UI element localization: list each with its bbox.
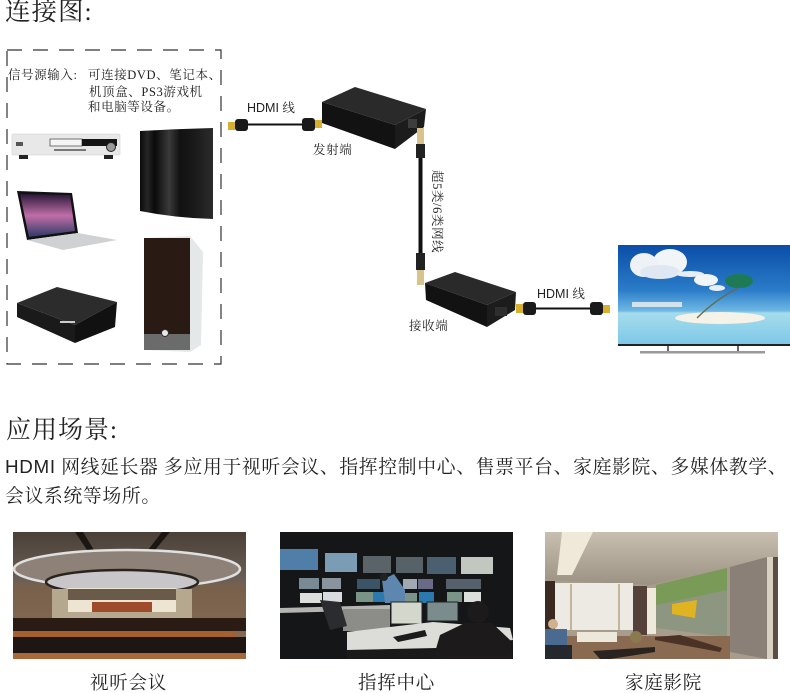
panel: command center (280, 532, 513, 693)
icon: game console (140, 128, 213, 219)
icon: laptop (17, 191, 117, 250)
HDMI cable: source to transmitter (228, 118, 322, 131)
icon: television (618, 245, 790, 354)
text: application description: 会议系统等场所。 (5, 485, 161, 507)
label: ethernet cable: 超5类/6类网线 (430, 170, 445, 253)
panel: home theater (545, 532, 778, 693)
text: signal source description: 和电脑等设备。 (88, 99, 180, 114)
icon: DVD player (12, 134, 120, 159)
icon: PC tower (144, 236, 203, 352)
label: receiver: 接收端 (409, 318, 448, 333)
label: HDMI cable 1: HDMI 线 (247, 100, 295, 115)
photo: command center (280, 532, 513, 659)
device: transmitter (322, 87, 426, 149)
text: signal source description (8, 67, 222, 114)
photo: conference room (13, 532, 246, 659)
label: HDMI cable 2: HDMI 线 (537, 286, 585, 301)
icon: set-top box (17, 287, 117, 343)
text: signal source description: 信号源输入: (8, 67, 78, 82)
text: application description (5, 456, 787, 507)
panel: conference room (13, 532, 246, 693)
text: signal source description: 可连接DVD、笔记本、 (88, 67, 222, 82)
ethernet cable (416, 128, 425, 285)
text: application description: HDMI 网线延长器 多应用于视听会议、指挥控制中心、售票平台、家庭影院、多媒体教学、 (5, 456, 787, 478)
label: transmitter: 发射端 (313, 142, 352, 157)
text: signal source description: 机顶盒、PS3游戏机 (89, 84, 203, 99)
device: receiver (425, 272, 516, 327)
HDMI cable: receiver to TV (516, 302, 610, 315)
heading: application scenarios: 应用场景: (6, 416, 118, 444)
panel: signal sources (7, 50, 222, 364)
photo: home theater (545, 532, 778, 659)
